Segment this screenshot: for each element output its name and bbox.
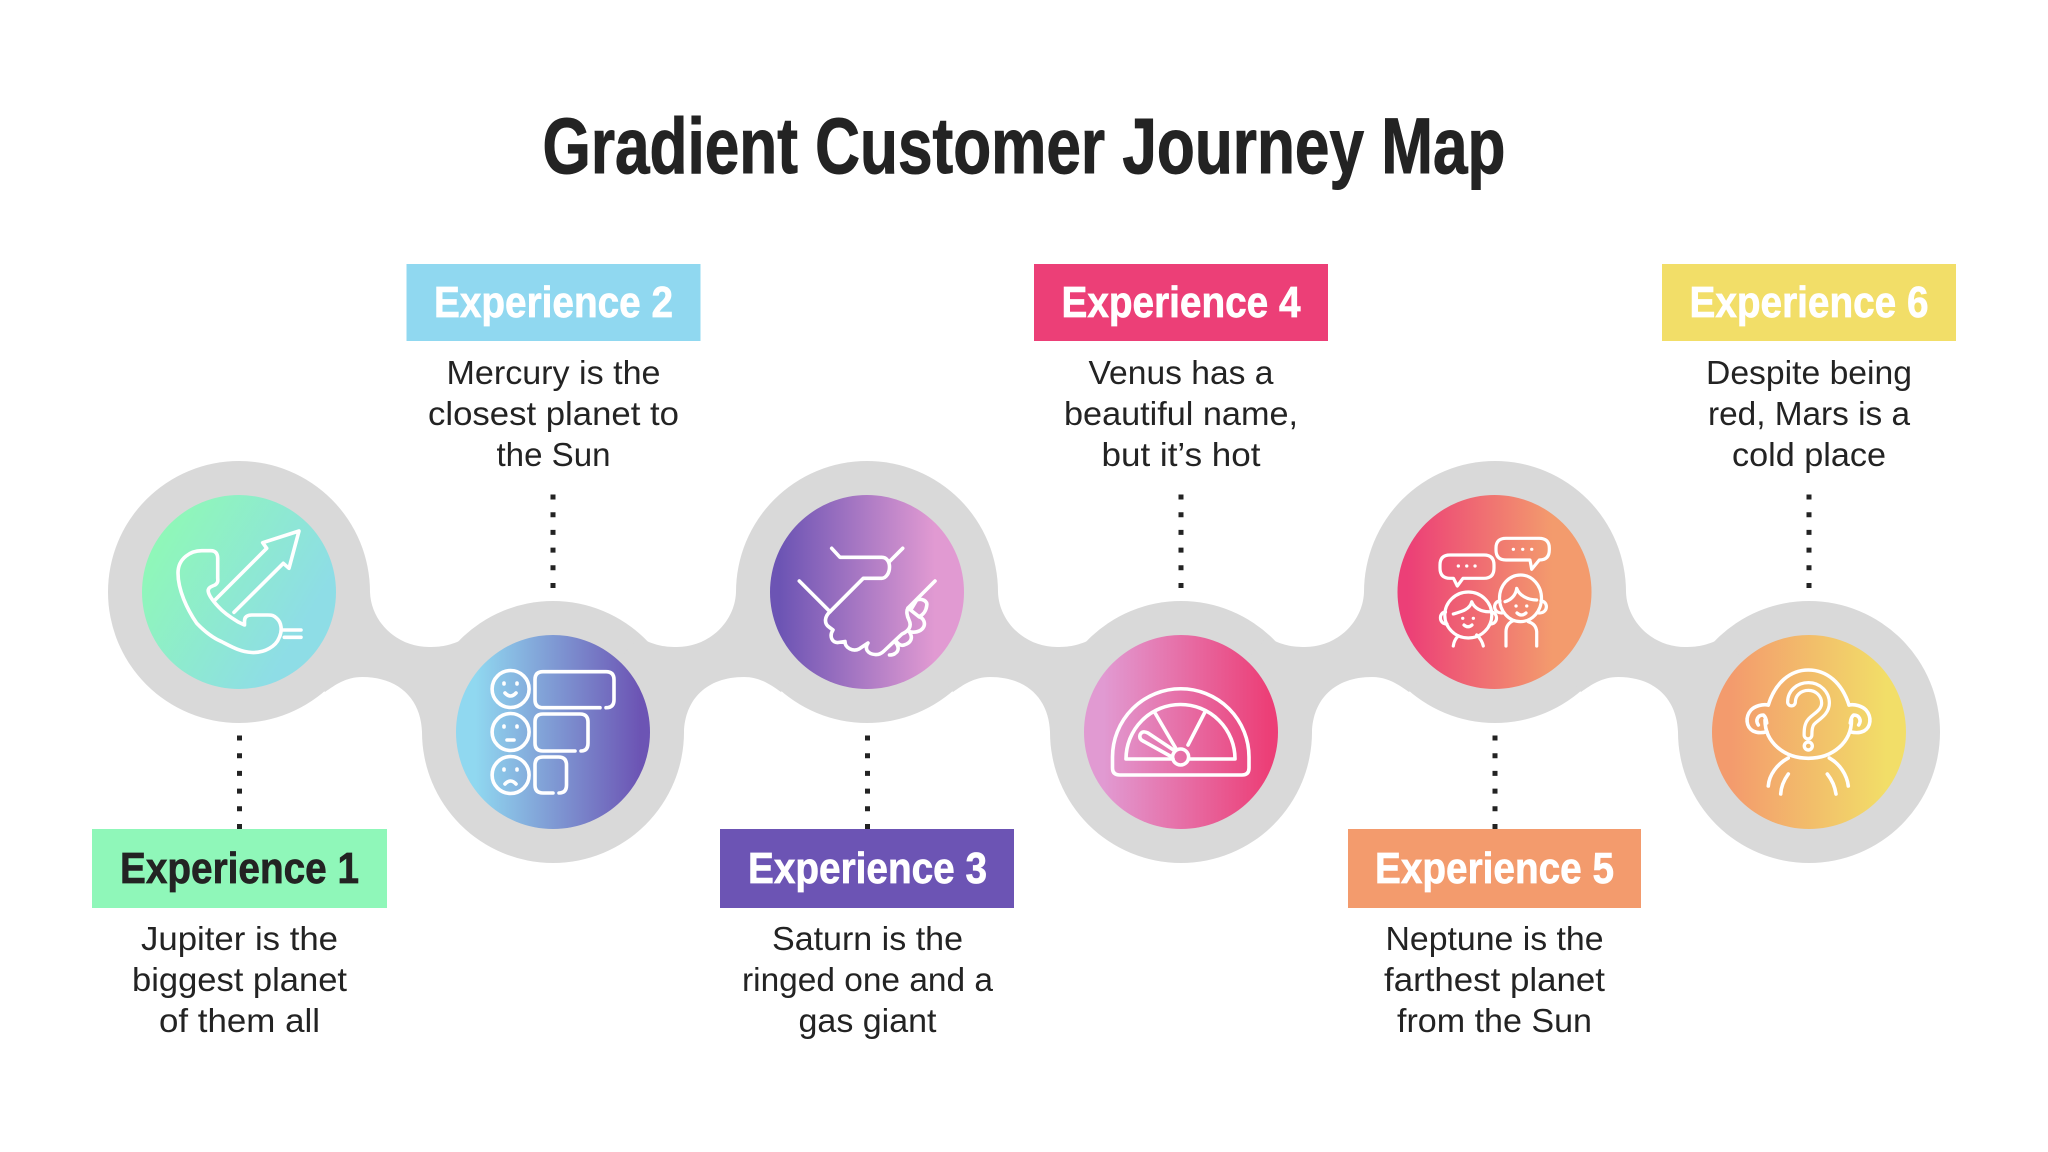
dotted connector 1	[237, 736, 242, 832]
gradient circle 5	[1398, 495, 1592, 689]
label: Experience 2	[406, 264, 700, 341]
description 3	[742, 920, 994, 1039]
step 3	[720, 495, 1014, 1039]
description 6: cold place	[1732, 436, 1886, 473]
title: Gradient Customer Journey Map	[542, 101, 1506, 190]
step 4	[1034, 264, 1328, 829]
label: Experience 1	[92, 829, 387, 908]
gradient circle 3	[770, 495, 964, 689]
label: Experience 1: Experience 1	[120, 844, 359, 893]
dotted connector 4	[1178, 494, 1184, 590]
question mark outline	[1792, 686, 1826, 750]
dotted connector 3	[865, 736, 870, 832]
description 3: Saturn is the	[772, 920, 963, 957]
description 2: closest planet to	[428, 395, 679, 432]
step 1	[92, 495, 387, 1039]
label: Experience 2: Experience 2	[434, 278, 673, 327]
description 5: farthest planet	[1384, 961, 1605, 998]
dotted connector 5	[1492, 736, 1498, 832]
description 1	[132, 920, 347, 1039]
label: Experience 3	[720, 829, 1014, 908]
description 6	[1706, 354, 1912, 473]
dotted connector 6	[1806, 494, 1812, 590]
description 5: Neptune is the	[1386, 920, 1604, 957]
description 3: ringed one and a	[742, 961, 994, 998]
description 5	[1384, 920, 1605, 1039]
description 4	[1064, 354, 1298, 473]
label: Experience 5: Experience 5	[1375, 844, 1614, 893]
step 5	[1348, 495, 1641, 1039]
icon: feedback faces and bars	[492, 670, 614, 794]
label: Experience 4	[1034, 264, 1328, 341]
step 6	[1662, 264, 1956, 829]
dotted connector 2	[550, 494, 556, 590]
icon: gauge	[1112, 689, 1249, 775]
description 1: of them all	[159, 1002, 320, 1039]
label: Experience 6: Experience 6	[1690, 278, 1928, 327]
description 4: but it’s hot	[1102, 436, 1260, 473]
label: Experience 4: Experience 4	[1062, 278, 1301, 327]
label: Experience 5	[1348, 829, 1641, 908]
gradient circle 6	[1712, 635, 1906, 829]
description 1: biggest planet	[132, 961, 347, 998]
icon: two people talking	[1440, 538, 1549, 646]
gradient circle 2	[456, 635, 650, 829]
description 5: from the Sun	[1397, 1002, 1592, 1039]
step 2	[406, 264, 700, 829]
icon: handshake	[799, 548, 935, 655]
label: Experience 6	[1662, 264, 1956, 341]
description 2	[428, 354, 679, 473]
gradient circle 1	[142, 495, 336, 689]
description 6: red, Mars is a	[1708, 395, 1911, 432]
description 6: Despite being	[1706, 354, 1912, 391]
grey winding path	[108, 461, 1940, 863]
description 1: Jupiter is the	[141, 920, 338, 957]
description 4: Venus has a	[1088, 354, 1274, 391]
description 4: beautiful name,	[1064, 395, 1298, 432]
description 3: gas giant	[798, 1002, 936, 1039]
description 2: Mercury is the	[446, 354, 660, 391]
description 2: the Sun	[496, 436, 610, 473]
gradient circle 4	[1084, 635, 1278, 829]
label: Experience 3: Experience 3	[748, 844, 987, 893]
icon: person with question mark	[1747, 670, 1870, 794]
icon: phone with arrow	[178, 531, 301, 653]
